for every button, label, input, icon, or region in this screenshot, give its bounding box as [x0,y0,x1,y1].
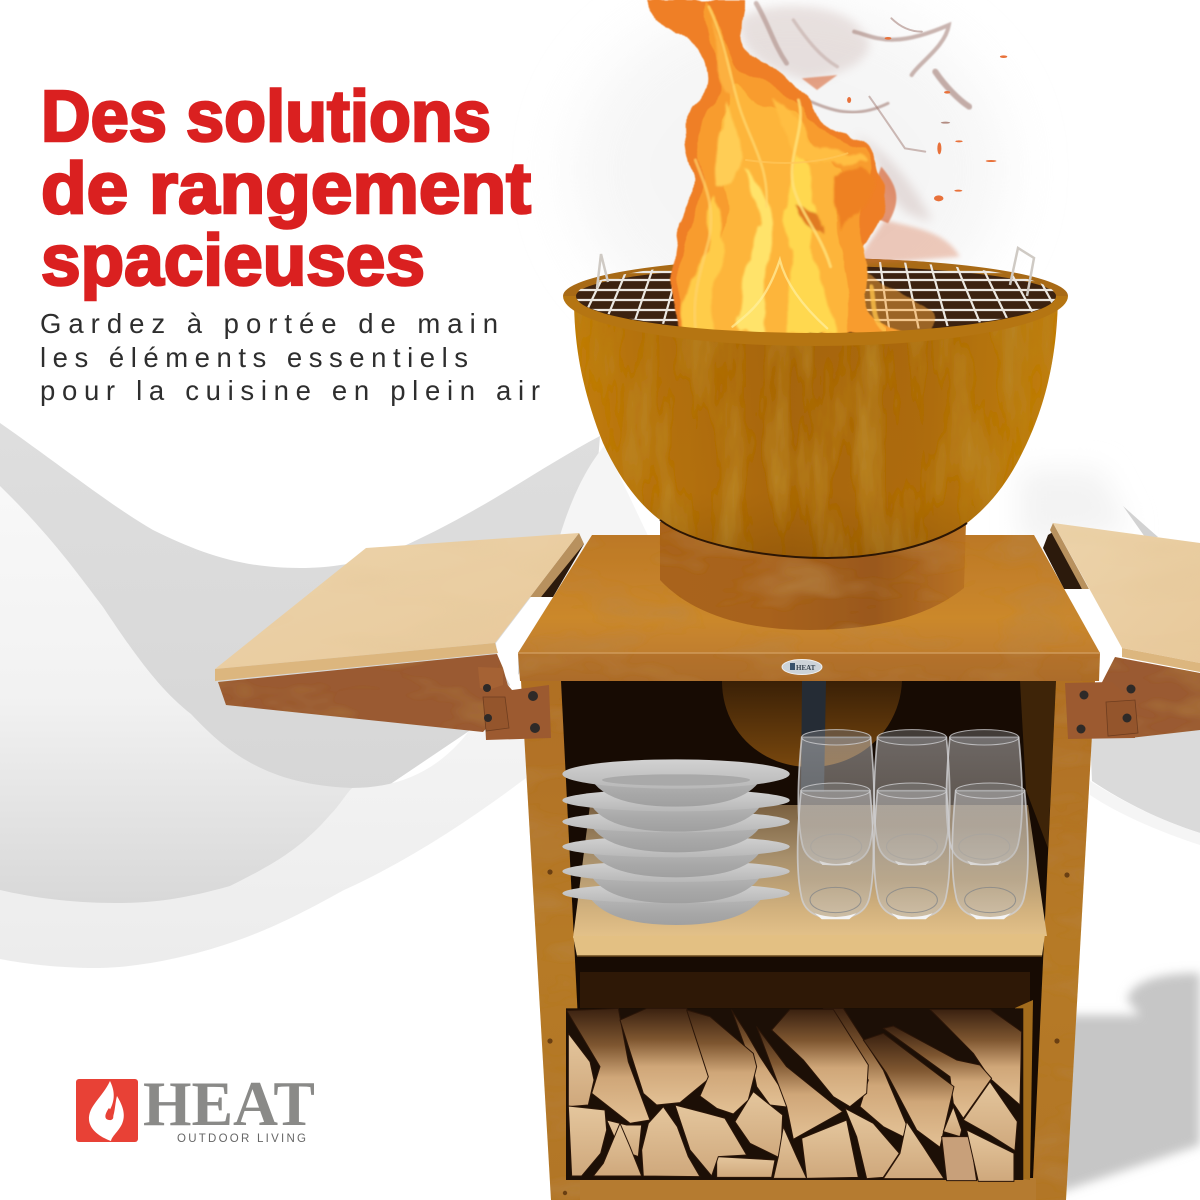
plate 1 [562,759,790,807]
back glass 3 [946,730,1022,865]
grill handle left [597,254,608,288]
embers [847,37,1007,201]
bowl front rim [563,296,1068,346]
smoke [739,3,969,265]
light flame [697,81,850,333]
front glass 2 [874,783,950,919]
plate 4 [562,836,790,877]
title: spacieuses [41,221,425,301]
stack of plates [562,759,790,925]
logo mark: flame on red square [76,1079,138,1142]
plate 3 [562,811,790,852]
brand badge: HEAT [796,664,816,672]
panel rivets [547,869,1070,1195]
stored pot seen through the opening [722,681,902,767]
logo wordmark: HEAT [143,1068,315,1139]
right hinge plates and screws [1065,682,1138,739]
flame tongues [695,7,885,330]
cabinet top [518,535,1100,681]
cooking grill [575,248,1070,335]
translucent lower-right flame [847,267,936,333]
flame wisps [685,20,873,333]
wooden shelf [573,805,1047,956]
cabinet body [521,680,1095,1200]
base ring [660,522,966,630]
bowl body [574,296,1058,558]
plate 6 [562,883,790,925]
cabinet interior [555,680,1060,1200]
subtitle: les éléments essentiels [40,342,468,373]
subtitle [40,308,540,406]
flames [646,0,936,333]
firewood stack [566,1008,1023,1181]
plate 2 [562,789,790,832]
outer flame [646,0,886,333]
subtitle: Gardez à portée de main [40,308,498,339]
subtitle: pour la cuisine en plein air [40,375,540,406]
upper compartment side wall [1020,681,1056,848]
hanging strap [801,681,826,792]
lower compartment right liner [1015,1000,1033,1180]
left folding shelf [215,533,584,732]
bottom frame rail [580,1178,1036,1200]
lower compartment back panel [580,972,1030,1008]
left hinge plates and screws [478,667,551,740]
back glass 2 [874,730,950,865]
logo: Heat Outdoor Living [76,1068,315,1145]
floor shadow [1060,973,1200,1192]
six drinking glasses [798,730,1028,919]
middle flame [680,0,902,333]
logo tagline: OUTDOOR LIVING [177,1133,306,1145]
title: Des solutions [41,77,491,157]
left side panel [521,681,587,1200]
back rim [563,258,1068,296]
right side panel [1032,681,1095,1200]
grill handle right [1010,248,1034,296]
brand badge [782,660,822,674]
bowl interior [568,258,1064,338]
fire bowl [563,258,1068,630]
plate 5 [562,861,790,903]
front glass 3 [952,783,1028,919]
back glass 1 [798,730,874,865]
front glass 1 [798,783,873,919]
title [41,77,531,301]
title: de rangement [41,149,531,229]
right folding shelf [1043,523,1200,738]
